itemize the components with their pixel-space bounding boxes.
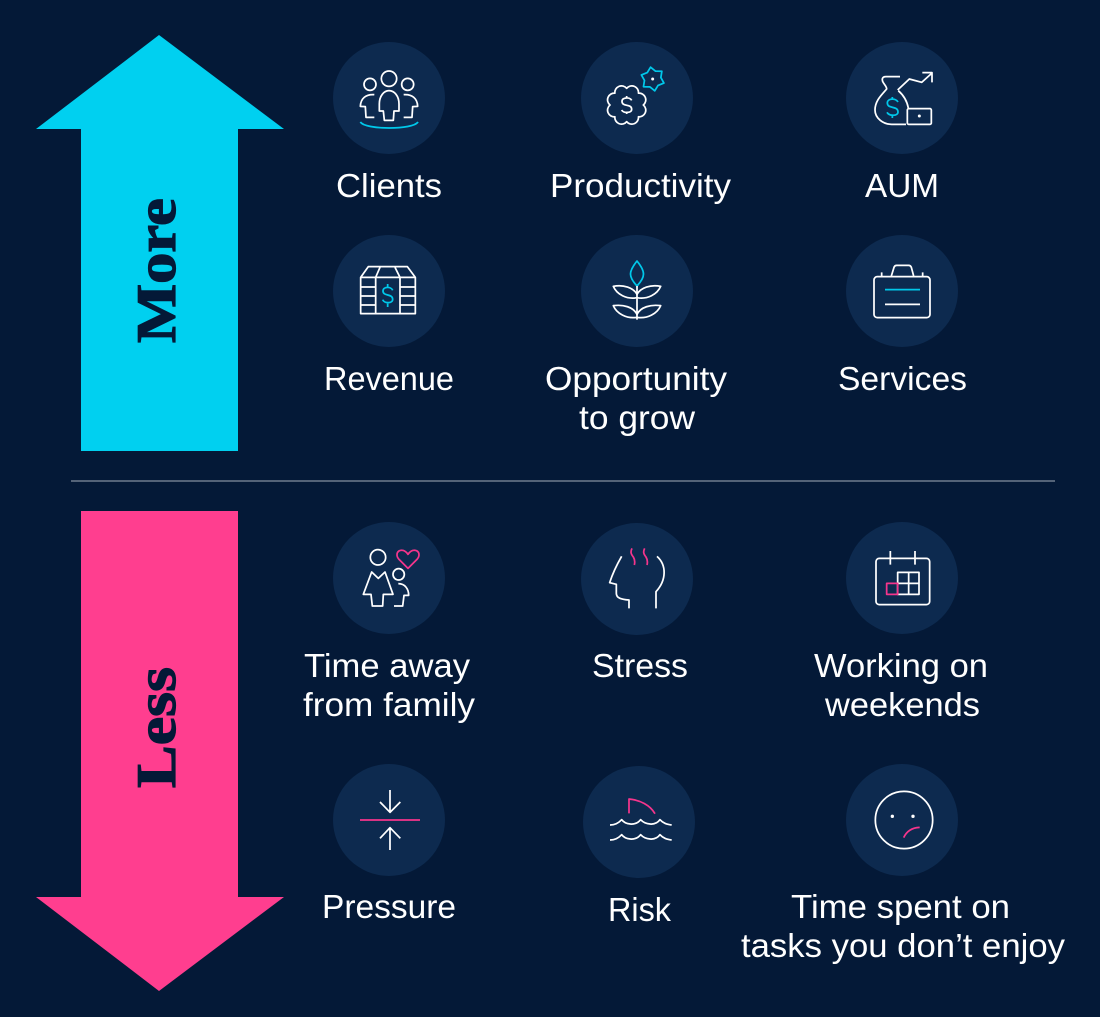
item: Working on weekends	[814, 522, 988, 724]
arrow: less (down)	[36, 511, 284, 991]
item: Clients	[333, 42, 445, 205]
heading: Less: Less	[126, 667, 188, 788]
label: Stress: Stress	[592, 648, 688, 685]
icon: shark fin in waves	[610, 799, 672, 840]
label: Pressure: Pressure	[322, 889, 456, 926]
label: AUM: AUM	[865, 168, 939, 205]
icon: calendar	[876, 551, 930, 605]
icon: sprouting plant	[613, 261, 661, 320]
item: Services	[838, 235, 967, 398]
item: Revenue	[324, 235, 454, 398]
label: Clients: Clients	[336, 168, 442, 205]
icon: head with steam	[610, 548, 664, 608]
icon: cash box	[361, 267, 415, 314]
label: Revenue: Revenue	[324, 361, 454, 398]
label: Opportunity to grow	[545, 361, 727, 437]
label: Opportunity to grow: Opportunity	[545, 361, 727, 398]
label: Time spent on tasks you don't enjoy	[741, 889, 1065, 965]
label: Risk: Risk	[608, 892, 671, 929]
item: Productivity	[550, 42, 731, 205]
label: Working on weekends: Working on	[814, 648, 988, 685]
icon: compression arrows	[360, 790, 420, 850]
item: Time away from family	[303, 522, 475, 724]
item: AUM	[846, 42, 958, 205]
label: Time spent on tasks you don't enjoy: Time spent on	[791, 889, 1010, 926]
heading: More: More	[125, 198, 187, 343]
item: Time spent on tasks you don't enjoy	[741, 764, 1065, 965]
label: Time spent on tasks you don't enjoy: tasks you don’t enjoy	[741, 928, 1065, 965]
icon: unhappy face	[875, 791, 933, 849]
icon: parent and child with heart	[363, 550, 419, 606]
label: Opportunity to grow: to grow	[579, 400, 696, 437]
label: Time away from family	[303, 648, 475, 724]
item: Risk	[583, 766, 695, 929]
icon: briefcase	[874, 265, 930, 318]
arrow: more (up)	[36, 35, 284, 451]
item: Stress	[581, 523, 693, 685]
label: Working on weekends	[814, 648, 988, 724]
label: Time away from family: from family	[303, 687, 475, 724]
item: Opportunity to grow	[545, 235, 727, 437]
label: Time away from family: Time away	[304, 648, 470, 685]
label: Working on weekends: weekends	[824, 687, 980, 724]
icon: group of people	[360, 71, 418, 128]
label: Services: Services	[838, 361, 967, 398]
icon: money bag and growth arrow	[875, 73, 932, 124]
item: Pressure	[322, 764, 456, 926]
label: Productivity: Productivity	[550, 168, 731, 205]
icon: gears with dollar	[608, 67, 664, 124]
